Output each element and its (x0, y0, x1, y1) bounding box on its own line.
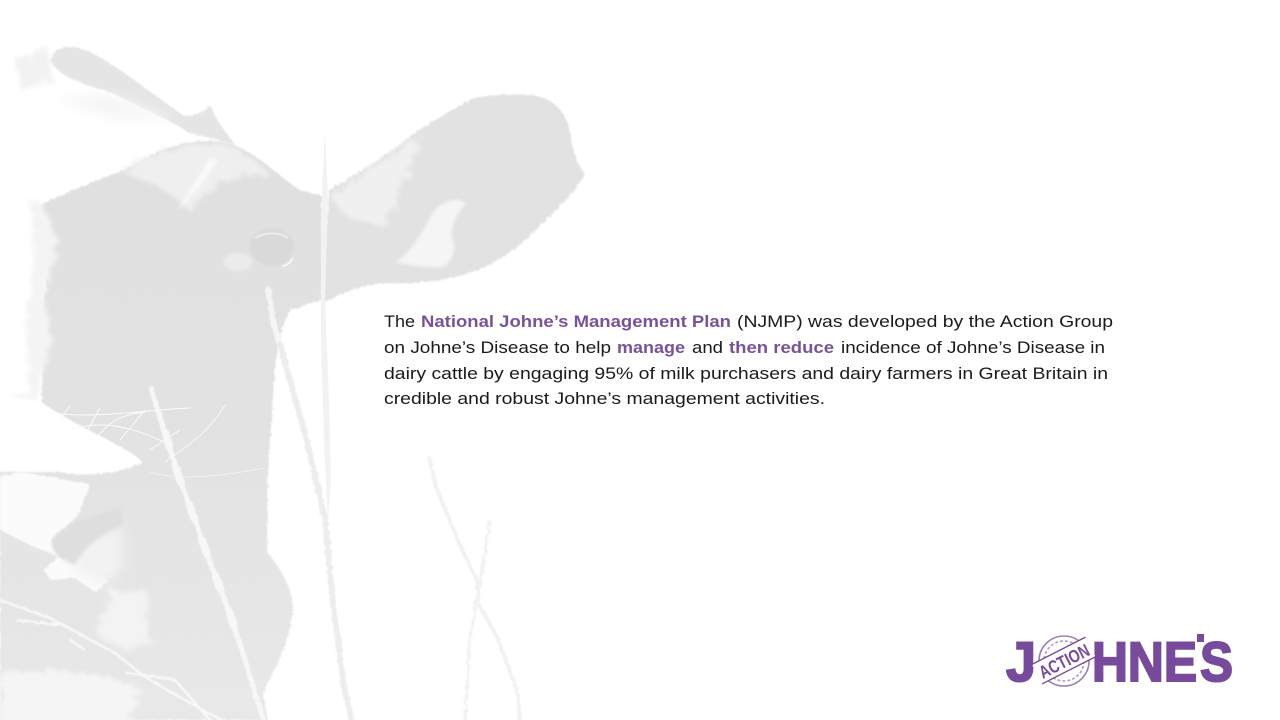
left speckled fur (15, 48, 52, 92)
logo letter J: J (1006, 630, 1036, 693)
grey grass blade centre (268, 290, 352, 720)
logo stamp: ACTION (1036, 640, 1093, 683)
white grass blade on head (151, 388, 264, 720)
muzzle lower patches (0, 472, 150, 720)
logo apostrophe (1197, 634, 1204, 642)
logo letters HNE: HNE (1092, 630, 1197, 693)
thin grass stem (321, 130, 331, 520)
right ear (322, 94, 585, 303)
fuzzy muzzle (95, 590, 150, 650)
background photo: cow and grasses (0, 47, 585, 720)
white nose patch (0, 472, 107, 592)
lower lip (0, 671, 143, 720)
left speckled blaze edge (0, 200, 58, 400)
line 1: The (384, 312, 415, 331)
inner ear highlight (395, 200, 466, 267)
line 1: (NJMP) was developed by the Action Group (737, 312, 1113, 331)
forelock pale underside (50, 95, 180, 120)
line 3: dairy cattle by engaging 95% of milk purchasers and dairy farmers in Great Britain in (384, 364, 1108, 383)
cow head silhouette (0, 141, 322, 720)
eye (224, 228, 294, 271)
whiskers (48, 405, 265, 477)
muzzle white band (0, 395, 142, 474)
nostril (52, 507, 123, 565)
line 2: manage (617, 338, 685, 357)
ear hair highlight (332, 132, 425, 225)
body text block (384, 312, 1113, 408)
line 2: then reduce (729, 338, 834, 357)
right grass blades (429, 457, 520, 720)
line 2: on Johne’s Disease to help (384, 338, 611, 357)
left white blaze (0, 195, 34, 400)
line 2 (384, 338, 1105, 357)
logo: Johne's Action (1006, 630, 1233, 693)
forelock ear tip (50, 47, 235, 145)
line 4: credible and robust Johne’s management activities. (384, 389, 825, 408)
lower-left grass blades (0, 600, 225, 720)
pale skin beside nostril (70, 525, 122, 585)
logo letter S: S (1200, 630, 1233, 693)
line 2: incidence of Johne’s Disease in (841, 338, 1105, 357)
forehead highlight (120, 143, 272, 212)
forehead streak (176, 158, 218, 212)
line 2: and (692, 338, 723, 357)
line 1 (384, 312, 1113, 331)
line 1: National Johne’s Management Plan (421, 312, 731, 331)
